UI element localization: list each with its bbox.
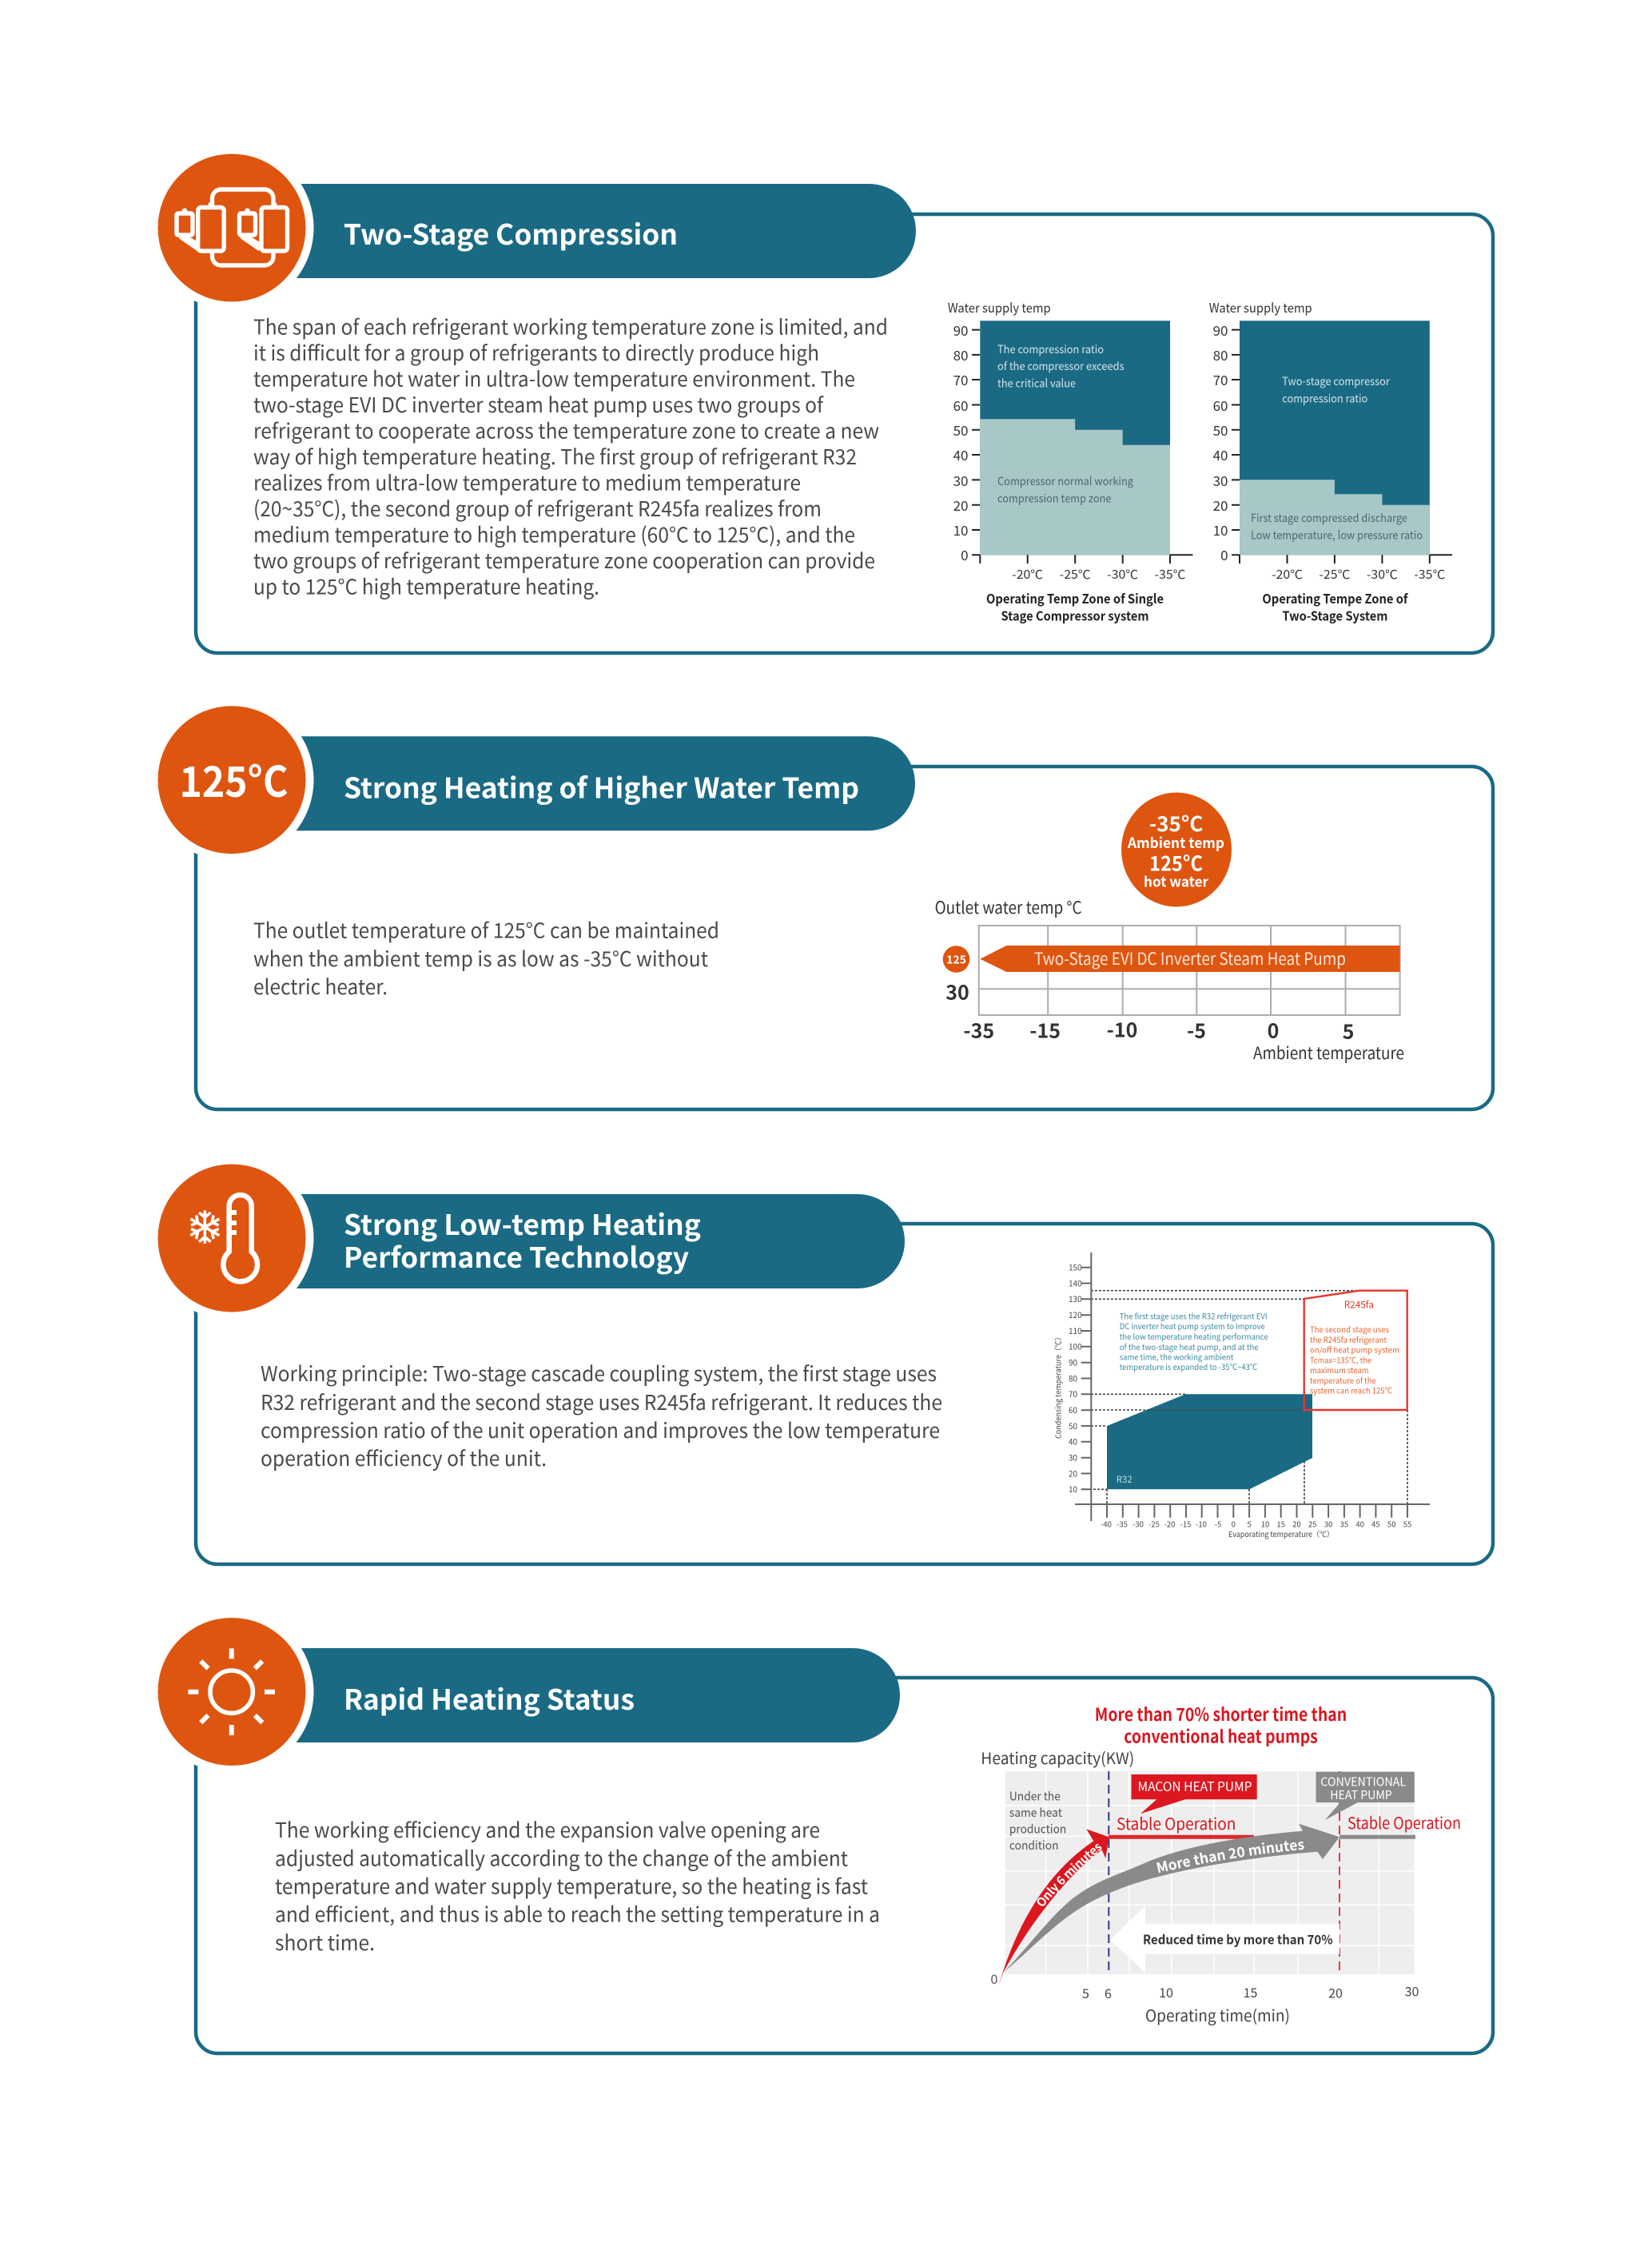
chart: heating capacity over time: production bbox=[1009, 1821, 1066, 1837]
chart: evaporating vs condensing temperature: -10 bbox=[1196, 1519, 1207, 1530]
chart: heating capacity over time: condition bbox=[1009, 1837, 1058, 1854]
callout: ambient and hot water badge bbox=[1121, 793, 1232, 906]
chart: heating capacity over time: 30 bbox=[1405, 1981, 1419, 2000]
chart: two-stage operating zone: 40 bbox=[1213, 444, 1228, 464]
body text: up to 125°C high temperature heating. bbox=[253, 571, 599, 601]
chart: single stage operating zone: Water supply temp bbox=[948, 297, 1051, 317]
chart: outlet water temperature: -35 bbox=[963, 1015, 994, 1044]
panel: strong low-temp heating bbox=[150, 1156, 1493, 1564]
icon: sun bbox=[158, 1618, 305, 1766]
chart: heating capacity over time: same heat bbox=[1009, 1804, 1062, 1821]
chart: single stage operating zone: Stage Compressor system bbox=[1001, 606, 1149, 625]
chart: evaporating vs condensing temperature: R245fa bbox=[1344, 1298, 1374, 1311]
icon ring bbox=[150, 1156, 313, 1320]
panel outline bbox=[196, 767, 1493, 1109]
chart: evaporating vs condensing temperature bbox=[1052, 1252, 1430, 1539]
chart: evaporating vs condensing temperature: same time, the working ambient bbox=[1120, 1351, 1234, 1362]
body text: realizes from ultra-low temperature to medium temperature bbox=[253, 467, 801, 497]
body text: two-stage EVI DC inverter steam heat pump uses two groups of bbox=[253, 389, 824, 419]
chart: heating capacity over time: 15 bbox=[1244, 1982, 1257, 2001]
body text: adjusted automatically according to the change of the ambient bbox=[275, 1843, 848, 1872]
chart: heating capacity over time: Operating time(min) bbox=[1145, 2003, 1290, 2026]
chart: evaporating vs condensing temperature: maximum steam bbox=[1310, 1364, 1369, 1376]
chart: evaporating vs condensing temperature: on/off heat pump system bbox=[1310, 1344, 1399, 1356]
body text bbox=[275, 1814, 880, 1957]
chart: evaporating vs condensing temperature: -30 bbox=[1133, 1519, 1144, 1530]
chart: single stage operating zone: 20 bbox=[953, 495, 969, 515]
chart: evaporating vs condensing temperature: 110 bbox=[1069, 1324, 1082, 1336]
body text: The working efficiency and the expansion valve opening are bbox=[275, 1814, 820, 1844]
chart: heating capacity over time: More than 70% shorter time than bbox=[1095, 1701, 1347, 1726]
body text: short time. bbox=[275, 1927, 375, 1957]
chart: evaporating vs condensing temperature: 130 bbox=[1069, 1292, 1082, 1304]
body text: electric heater. bbox=[253, 971, 388, 1001]
chart: heating capacity over time: Stable Operation bbox=[1347, 1810, 1461, 1834]
chart: evaporating vs condensing temperature: temperature is expanded to -35℃~43℃ bbox=[1120, 1360, 1257, 1372]
chart: evaporating vs condensing temperature: 55 bbox=[1403, 1519, 1411, 1530]
chart: heating capacity over time: 0 bbox=[991, 1969, 998, 1988]
heading bar bbox=[232, 736, 915, 830]
chart: heating capacity over time: 20 bbox=[1328, 1982, 1343, 2001]
callout: ambient and hot water badge: 125°C bbox=[1149, 847, 1203, 878]
chart: evaporating vs condensing temperature: -35 bbox=[1117, 1519, 1128, 1530]
chart: evaporating vs condensing temperature: Tcmax=135℃, the bbox=[1310, 1353, 1371, 1365]
body text: The span of each refrigerant working temperature zone is limited, and bbox=[253, 312, 888, 340]
chart: single stage operating zone: 90 bbox=[953, 320, 969, 340]
chart: two-stage operating zone: 0 bbox=[1220, 544, 1228, 564]
chart: evaporating vs condensing temperature: of the two-stage heat pump, and at the bbox=[1120, 1340, 1259, 1352]
chart: single stage operating zone: The compression ratio bbox=[997, 341, 1104, 357]
chart: single stage operating zone: 30 bbox=[953, 470, 969, 490]
chart: heating capacity over time: 6 bbox=[1105, 1983, 1112, 2002]
heading: Strong Heating of Higher Water Temp bbox=[344, 766, 859, 807]
chart: two-stage operating zone bbox=[1209, 297, 1452, 625]
chart: outlet water temperature bbox=[935, 895, 1404, 1065]
chart: single stage operating zone: Compressor normal working bbox=[997, 473, 1133, 489]
panel outline bbox=[196, 214, 1493, 653]
chart: evaporating vs condensing temperature: 30 bbox=[1069, 1452, 1078, 1463]
body text bbox=[253, 312, 888, 601]
chart: single stage operating zone: 70 bbox=[953, 369, 969, 389]
chart: evaporating vs condensing temperature: 45 bbox=[1371, 1519, 1380, 1530]
callout: ambient and hot water badge: hot water bbox=[1144, 871, 1208, 892]
body text: temperature and water supply temperature, so the heating is fast bbox=[275, 1870, 868, 1901]
chart: outlet water temperature: -10 bbox=[1107, 1015, 1137, 1044]
body text: compression ratio of the unit operation and improves the low temperature bbox=[261, 1415, 940, 1444]
panel: rapid heating status bbox=[158, 1618, 1495, 2056]
chart: single stage operating zone: 10 bbox=[953, 520, 969, 540]
icon: compressors bbox=[158, 153, 305, 302]
chart: two-stage operating zone: 90 bbox=[1213, 320, 1228, 340]
chart: evaporating vs condensing temperature: The second stage uses bbox=[1310, 1323, 1389, 1335]
chart: evaporating vs condensing temperature: 70 bbox=[1069, 1388, 1078, 1400]
chart: outlet water temperature: Two-Stage EVI DC Inverter Steam Heat Pump bbox=[1034, 946, 1346, 970]
chart: evaporating vs condensing temperature: 10 bbox=[1069, 1483, 1078, 1495]
chart: evaporating vs condensing temperature: -5 bbox=[1215, 1519, 1221, 1530]
icon: 125°C badge bbox=[158, 706, 305, 854]
chart: evaporating vs condensing temperature: 90 bbox=[1069, 1356, 1078, 1368]
icon ring bbox=[150, 698, 313, 862]
chart: evaporating vs condensing temperature: -40 bbox=[1101, 1519, 1112, 1530]
body text bbox=[261, 1358, 942, 1472]
chart: heating capacity over time: MACON HEAT PUMP bbox=[1138, 1776, 1252, 1795]
chart: evaporating vs condensing temperature: 80 bbox=[1069, 1372, 1078, 1384]
heading: Two-Stage Compression bbox=[344, 213, 678, 253]
chart: outlet water temperature: 0 bbox=[1268, 1015, 1279, 1044]
chart: evaporating vs condensing temperature: the low temperature heating performance bbox=[1120, 1330, 1268, 1342]
body text: medium temperature to high temperature (60°C to 125°C), and the bbox=[253, 520, 855, 548]
chart: single stage operating zone: 0 bbox=[961, 544, 969, 564]
chart: two-stage operating zone: 20 bbox=[1213, 495, 1228, 515]
chart: evaporating vs condensing temperature: 100 bbox=[1069, 1340, 1082, 1352]
chart: evaporating vs condensing temperature: 140 bbox=[1069, 1276, 1082, 1288]
chart: evaporating vs condensing temperature: 40 bbox=[1355, 1519, 1364, 1530]
chart: evaporating vs condensing temperature: -15 bbox=[1180, 1519, 1191, 1530]
heading: Performance Technology bbox=[344, 1236, 689, 1276]
callout: ambient and hot water badge: Ambient temp bbox=[1127, 832, 1224, 853]
chart: heating capacity over time: Heating capacity(KW) bbox=[981, 1746, 1134, 1769]
chart: two-stage operating zone: Water supply temp bbox=[1209, 297, 1312, 317]
body text: way of high temperature heating. The first group of refrigerant R32 bbox=[253, 441, 857, 471]
chart: evaporating vs condensing temperature: system can reach 125℃ bbox=[1310, 1384, 1392, 1396]
body text: two groups of refrigerant temperature zone cooperation can provide bbox=[253, 545, 875, 575]
chart: evaporating vs condensing temperature: Condensing temperature（℃） bbox=[1052, 1333, 1063, 1439]
chart: two-stage operating zone: 60 bbox=[1213, 395, 1228, 415]
chart: evaporating vs condensing temperature: 25 bbox=[1308, 1519, 1317, 1530]
chart: outlet water temperature: Outlet water temp °C bbox=[935, 895, 1082, 919]
chart: evaporating vs condensing temperature: Evaporating temperature（℃） bbox=[1228, 1528, 1334, 1539]
chart: heating capacity over time: Only 6 minutes bbox=[1037, 1843, 1101, 1906]
chart: evaporating vs condensing temperature: DC inverter heat pump system to improve bbox=[1120, 1320, 1265, 1332]
chart: two-stage operating zone: 10 bbox=[1213, 520, 1228, 540]
chart: single stage operating zone: 60 bbox=[953, 395, 969, 415]
chart: evaporating vs condensing temperature: 15 bbox=[1276, 1519, 1285, 1530]
chart: single stage operating zone: Operating Temp Zone of Single bbox=[986, 588, 1164, 607]
chart: two-stage operating zone: 80 bbox=[1213, 344, 1228, 364]
callout: ambient and hot water badge: -35°C bbox=[1149, 808, 1203, 838]
panel outline bbox=[196, 1678, 1493, 2053]
chart: single stage operating zone: -20℃ bbox=[1012, 566, 1043, 583]
chart: evaporating vs condensing temperature: 5 bbox=[1247, 1519, 1252, 1530]
chart: single stage operating zone: compression temp zone bbox=[997, 491, 1112, 507]
chart: two-stage operating zone: 50 bbox=[1213, 420, 1228, 440]
heading bar bbox=[232, 1648, 900, 1742]
chart: evaporating vs condensing temperature: The first stage uses the R32 refrigerant EVI bbox=[1120, 1309, 1268, 1322]
chart: two-stage operating zone: Two-Stage System bbox=[1282, 606, 1387, 625]
panel outline bbox=[196, 1224, 1493, 1564]
chart: heating capacity over time: 10 bbox=[1159, 1982, 1173, 2001]
icon: snowflake and thermometer bbox=[158, 1164, 305, 1312]
icon ring bbox=[150, 1610, 313, 1774]
chart: outlet water temperature: 5 bbox=[1343, 1017, 1354, 1045]
chart: evaporating vs condensing temperature: -25 bbox=[1148, 1519, 1160, 1530]
chart: heating capacity over time: 5 bbox=[1082, 1983, 1089, 2002]
chart: two-stage operating zone: -30℃ bbox=[1367, 566, 1398, 583]
chart: evaporating vs condensing temperature: 10 bbox=[1261, 1519, 1269, 1530]
chart: outlet water temperature: 125 bbox=[946, 951, 966, 967]
heading bbox=[344, 1203, 701, 1276]
panel: strong heating of higher water temp bbox=[150, 698, 1493, 1109]
chart: single stage operating zone: -25℃ bbox=[1060, 566, 1091, 583]
chart: evaporating vs condensing temperature: 50 bbox=[1069, 1420, 1078, 1432]
body text: (20~35°C), the second group of refrigerant R245fa realizes from bbox=[253, 493, 822, 523]
chart: single stage operating zone: the critical value bbox=[997, 376, 1076, 392]
chart: heating capacity over time: CONVENTIONAL bbox=[1320, 1773, 1406, 1790]
chart: two-stage operating zone: -35℃ bbox=[1414, 566, 1445, 583]
chart: single stage operating zone: 80 bbox=[953, 344, 969, 364]
body text: it is difficult for a group of refrigerants to directly produce high bbox=[253, 337, 819, 367]
body text: Working principle: Two-stage cascade coupling system, the first stage uses bbox=[261, 1358, 937, 1388]
chart: heating capacity over time: Under the bbox=[1009, 1787, 1061, 1805]
chart: heating capacity over time: Stable Operation bbox=[1117, 1811, 1236, 1834]
chart: two-stage operating zone: 70 bbox=[1213, 369, 1228, 389]
chart: evaporating vs condensing temperature: 20 bbox=[1069, 1467, 1078, 1479]
chart: evaporating vs condensing temperature: -20 bbox=[1164, 1519, 1175, 1530]
body text: when the ambient temp is as low as -35°C without bbox=[253, 943, 708, 973]
heading: Rapid Heating Status bbox=[344, 1678, 635, 1718]
chart: evaporating vs condensing temperature: 30 bbox=[1324, 1519, 1332, 1530]
body text: operation efficiency of the unit. bbox=[261, 1443, 547, 1472]
chart: outlet water temperature: -15 bbox=[1029, 1015, 1061, 1044]
chart: single stage operating zone bbox=[948, 297, 1192, 625]
chart: evaporating vs condensing temperature: temperature of the bbox=[1310, 1374, 1376, 1386]
body text bbox=[253, 914, 719, 1001]
chart: two-stage operating zone: compression ratio bbox=[1282, 390, 1367, 406]
chart: heating capacity over time: conventional heat pumps bbox=[1124, 1723, 1318, 1749]
chart: outlet water temperature: 30 bbox=[945, 977, 969, 1006]
chart: two-stage operating zone: Two-stage compressor bbox=[1282, 373, 1390, 389]
chart: evaporating vs condensing temperature: 150 bbox=[1069, 1261, 1082, 1272]
chart: two-stage operating zone: Low temperature, low pressure ratio bbox=[1251, 528, 1423, 544]
chart: outlet water temperature: -5 bbox=[1187, 1015, 1206, 1044]
chart: outlet water temperature: Ambient temperature bbox=[1253, 1041, 1404, 1065]
icon ring bbox=[150, 145, 313, 310]
chart: heating capacity over time: HEAT PUMP bbox=[1330, 1786, 1392, 1803]
chart: two-stage operating zone: -20℃ bbox=[1272, 566, 1303, 583]
body text: refrigerant to cooperate across the temperature zone to create a new bbox=[253, 416, 879, 444]
icon: 125°C badge: 125°C bbox=[179, 749, 288, 810]
chart: single stage operating zone: -30℃ bbox=[1107, 566, 1138, 583]
chart: heating capacity over time bbox=[981, 1701, 1461, 2026]
chart: evaporating vs condensing temperature: 35 bbox=[1340, 1519, 1348, 1530]
chart: evaporating vs condensing temperature: 120 bbox=[1069, 1308, 1082, 1320]
chart: evaporating vs condensing temperature: 20 bbox=[1292, 1519, 1301, 1530]
chart: two-stage operating zone: -25℃ bbox=[1319, 566, 1350, 583]
chart: single stage operating zone: -35℃ bbox=[1154, 566, 1186, 583]
body text: and efficient, and thus is able to reach the setting temperature in a bbox=[275, 1899, 880, 1928]
heading bar bbox=[232, 184, 916, 278]
chart: evaporating vs condensing temperature: R32 bbox=[1117, 1473, 1133, 1486]
chart: evaporating vs condensing temperature: 0 bbox=[1232, 1519, 1236, 1530]
chart: single stage operating zone: of the compressor exceeds bbox=[997, 358, 1125, 374]
heading: Strong Low-temp Heating bbox=[344, 1203, 701, 1244]
body text: R32 refrigerant and the second stage uses R245fa refrigerant. It reduces the bbox=[261, 1387, 942, 1416]
chart: single stage operating zone: 40 bbox=[953, 444, 969, 464]
body text: The outlet temperature of 125°C can be maintained bbox=[253, 914, 719, 945]
chart: evaporating vs condensing temperature: the R245fa refrigerant bbox=[1310, 1333, 1387, 1345]
chart: evaporating vs condensing temperature: 40 bbox=[1069, 1436, 1078, 1448]
chart: heating capacity over time: Reduced time by more than 70% bbox=[1143, 1929, 1333, 1949]
chart: two-stage operating zone: 30 bbox=[1213, 470, 1228, 490]
chart: two-stage operating zone: First stage compressed discharge bbox=[1251, 510, 1407, 526]
chart: evaporating vs condensing temperature: 50 bbox=[1387, 1519, 1395, 1530]
chart: single stage operating zone: 50 bbox=[953, 420, 969, 440]
chart: two-stage operating zone: Operating Tempe Zone of bbox=[1262, 588, 1408, 607]
body text: temperature hot water in ultra-low temperature environment. The bbox=[253, 363, 855, 393]
heading bar bbox=[232, 1194, 905, 1288]
chart: heating capacity over time: More than 20 minutes bbox=[1156, 1841, 1304, 1874]
panel: two-stage compression bbox=[150, 145, 1493, 653]
chart: evaporating vs condensing temperature: 60 bbox=[1069, 1404, 1078, 1416]
